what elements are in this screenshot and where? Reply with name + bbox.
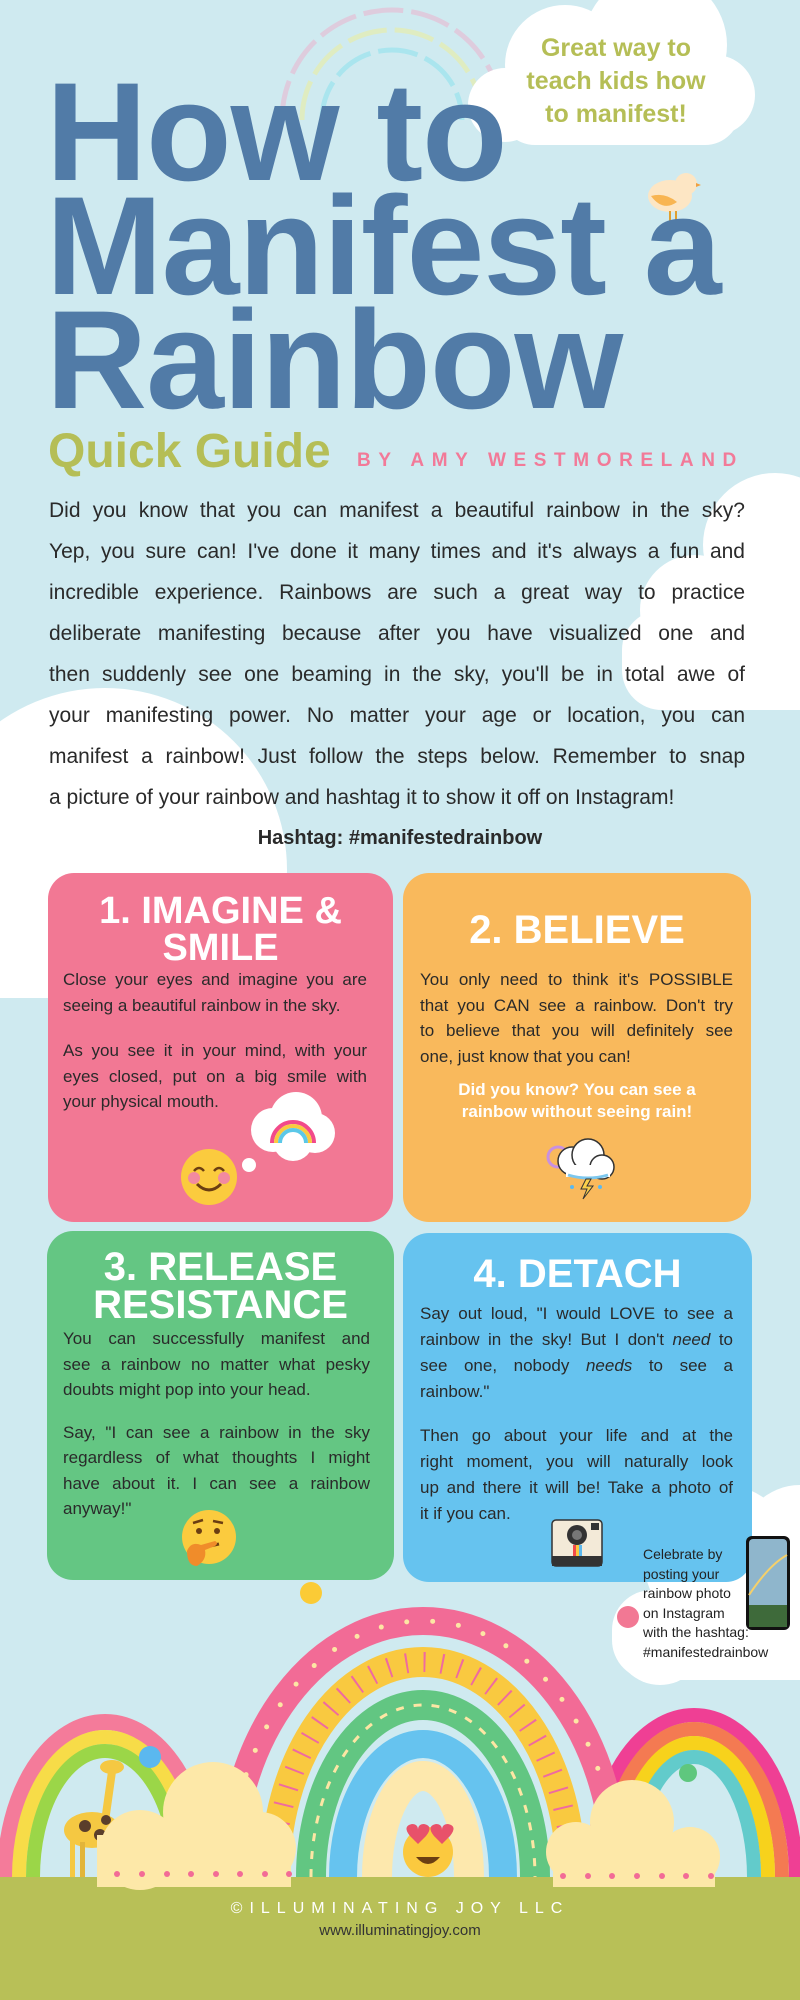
did you know note: rainbow without seeing rain! [462, 1102, 692, 1121]
panel: 4 detach [403, 1233, 752, 1582]
panel: 2 believe [403, 873, 751, 1222]
icon: storm cloud [546, 1138, 615, 1200]
intro paragraph: manifest a rainbow! Just follow the steps below. Remember to snap [49, 745, 745, 768]
heading 1: 1. IMAGINE & [99, 890, 342, 932]
intro paragraph [49, 499, 745, 809]
heading 3: RESISTANCE [93, 1283, 348, 1327]
text 4: Say out loud, "I would LOVE to see a [420, 1304, 733, 1323]
big rainbow [230, 1621, 616, 1877]
callout: great way to teach kids: teach kids how [526, 67, 706, 95]
intro paragraph: your manifesting power. No matter your age or location, you can [49, 704, 745, 727]
pink dot [617, 1606, 639, 1628]
intro paragraph: a picture of your rainbow and hashtag it to show it off on Instagram! [49, 786, 674, 809]
bird [648, 173, 701, 222]
cream clouds bottom [97, 1762, 720, 1890]
text 3: see a rainbow no matter what pesky [63, 1354, 370, 1374]
footer copyright: ©ILLUMINATING JOY LLC [231, 1900, 569, 1917]
heading 3: 3. RELEASE [104, 1245, 337, 1289]
text 4 [420, 1304, 733, 1523]
title: How to [46, 53, 507, 210]
text 3: Say, "I can see a rainbow in the sky [63, 1422, 370, 1442]
text 2: one, just know that you can! [420, 1046, 631, 1066]
panel: 1 imagine & smile [48, 873, 393, 1222]
heading 1: SMILE [162, 927, 279, 969]
byline: BY AMY WESTMORELAND [357, 450, 744, 471]
text 2: You only need to think it's POSSIBLE [420, 970, 733, 989]
text 1: As you see it in your mind, with your [63, 1041, 367, 1060]
text 3: anyway!" [63, 1499, 131, 1518]
text 1: eyes closed, put on a big smile with [63, 1066, 367, 1086]
celebrate text: posting your [643, 1566, 719, 1582]
heading 3 [93, 1245, 348, 1327]
giraffe [64, 1760, 124, 1877]
heading 1 [99, 890, 342, 969]
callout: great way to teach kids: Great way to [541, 34, 691, 62]
celebrate text [643, 1546, 768, 1660]
text 4: rainbow." [420, 1382, 489, 1401]
title [46, 53, 722, 438]
celebrate text: on Instagram [643, 1604, 725, 1620]
intro paragraph: incredible experience. Rainbows are such a great way to practice [49, 581, 745, 604]
callout: great way to teach kids: to manifest! [545, 100, 687, 128]
faded rainbow top [282, 10, 502, 120]
text 3: You can successfully manifest and [63, 1329, 370, 1348]
text 4: Then go about your life and at the [420, 1426, 733, 1445]
text 3 [63, 1329, 370, 1518]
intro paragraph: then suddenly see one beaming in the sky, you'll be in total awe of [49, 663, 745, 686]
heading 2: 2. BELIEVE [469, 908, 685, 952]
callout: great way to teach kids [526, 34, 706, 128]
text 3: have about it. I can see a rainbow [63, 1474, 370, 1492]
footer url: www.illuminatingjoy.com [319, 1922, 481, 1939]
celebrate text: with the hashtag: [643, 1624, 749, 1640]
intro paragraph: deliberate manifesting because after you have visualized one and [49, 622, 745, 645]
heart eyes emoji [403, 1824, 454, 1877]
heading 4: 4. DETACH [473, 1252, 682, 1296]
right rainbow [592, 1715, 796, 1877]
left rainbow [5, 1722, 205, 1877]
celebrate text: rainbow photo [643, 1585, 731, 1601]
intro paragraph: Yep, you sure can! I've done it many times and it's always a fun and [49, 540, 745, 563]
title: Manifest a [46, 167, 721, 324]
did you know note [458, 1080, 696, 1121]
hashtag: Hashtag: #manifestedrainbow [258, 827, 542, 849]
text 4: see one, nobody needs to see a [420, 1356, 733, 1375]
icon: smiley with thought rainbow [181, 1092, 335, 1205]
cloud: top right [468, 0, 755, 145]
celebrate text: #manifestedrainbow [643, 1644, 768, 1660]
text 2: to believe that you will definitely see [420, 1021, 733, 1040]
icon: thinking face [182, 1510, 236, 1566]
text 4: it if you can. [420, 1504, 511, 1523]
icon: phone [746, 1536, 790, 1630]
text 1: seeing a beautiful rainbow in the sky. [63, 996, 341, 1014]
cloud: celebrate [612, 1484, 800, 1685]
ground [0, 1877, 800, 2000]
text 4: rainbow in the sky! But I don't need to [420, 1330, 733, 1349]
cloud: right middle [622, 473, 800, 710]
intro paragraph: Did you know that you can manifest a beautiful rainbow in the sky? [49, 499, 745, 522]
text 3: regardless of what thoughts I might [63, 1448, 370, 1467]
text 4: up and there it will be! Take a photo of [420, 1478, 733, 1497]
text 4: right moment, you will naturally look [420, 1452, 733, 1471]
did you know note: Did you know? You can see a [458, 1080, 696, 1099]
callout: celebrate on instagram [643, 1536, 790, 1660]
cloud pink dots [114, 1871, 714, 1879]
panel: 3 release resistance [47, 1231, 394, 1580]
text 1 [63, 970, 367, 1111]
text 3: doubts might pop into your head. [63, 1380, 311, 1399]
yellow dot [300, 1582, 322, 1604]
subtitle: quick guide: Quick Guide [48, 425, 331, 478]
title: Rainbow [46, 281, 622, 438]
cloud: left middle [0, 688, 287, 998]
text 1: Close your eyes and imagine you are [63, 970, 367, 989]
celebrate text: Celebrate by [643, 1546, 722, 1562]
icon: polaroid camera [551, 1519, 603, 1567]
text 2: that you CAN see a rainbow. Don't try [420, 996, 733, 1014]
text 1: your physical mouth. [63, 1092, 219, 1111]
text 2 [420, 970, 733, 1066]
